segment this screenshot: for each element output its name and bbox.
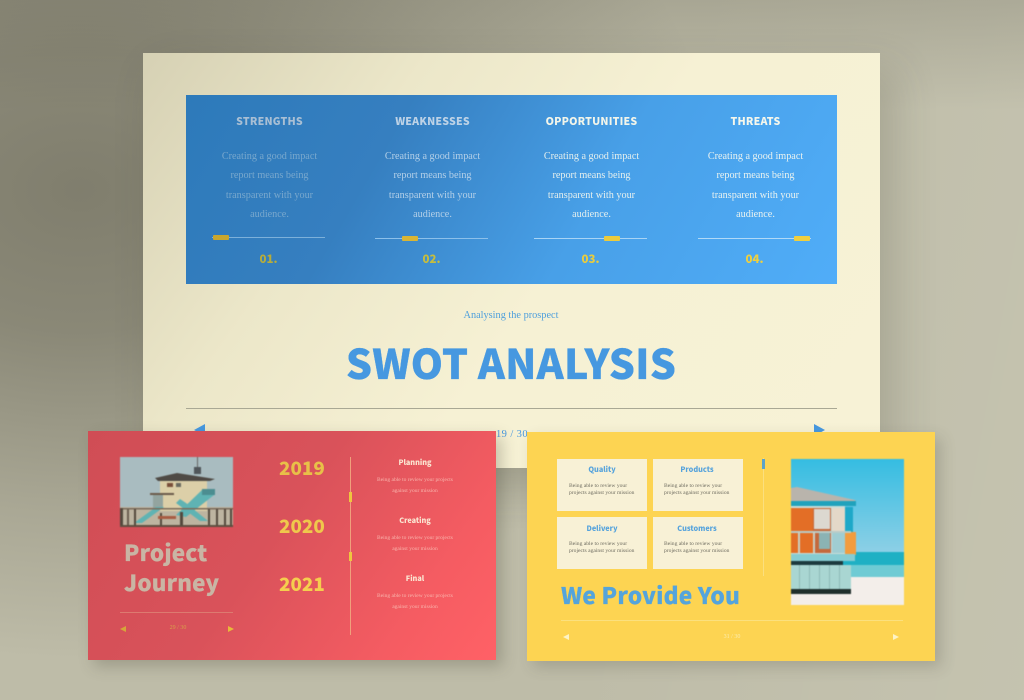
text: delivery body: projects against your mission — [569, 548, 634, 554]
text: quality body — [569, 482, 634, 496]
text: threats body: report means being — [716, 170, 795, 181]
text: products body: Being able to review your — [664, 482, 722, 488]
text: final body: against your mission — [392, 604, 438, 610]
text: creating body: Being able to review your projects — [377, 535, 453, 541]
text: customers body — [664, 540, 730, 554]
timeline — [349, 457, 352, 635]
number: 04: 04. — [745, 251, 764, 267]
heading: final: Final — [406, 574, 424, 584]
card: delivery — [557, 517, 647, 569]
divider line — [120, 612, 233, 613]
divider line — [561, 620, 903, 621]
year: 2019: 2019 — [279, 454, 325, 481]
number: 01: 01. — [259, 251, 278, 267]
panel: We Provide You slide — [527, 432, 935, 661]
text: weaknesses body: Creating a good impact — [385, 150, 480, 162]
card: quality — [557, 459, 647, 511]
title: Project Journey — [124, 536, 219, 598]
text: strengths body: report means being — [230, 170, 309, 181]
card: customers — [653, 517, 743, 569]
text: threats body — [708, 150, 804, 220]
text: weaknesses body: audience. — [413, 209, 452, 220]
text: opportunities body: report means being — [552, 170, 631, 181]
page number: 31 / 30: 31 / 30 — [724, 634, 740, 640]
text: quality body: projects against your mission — [569, 490, 634, 496]
text: quality body: Being able to review your — [569, 482, 627, 488]
text: weaknesses body: report means being — [393, 170, 472, 181]
text: threats body: Creating a good impact — [708, 150, 803, 162]
title: Project Journey: Project — [124, 536, 207, 568]
text: weaknesses body — [385, 150, 480, 220]
text: opportunities body: transparent with your — [548, 190, 635, 200]
arrow: previous — [194, 424, 205, 436]
text: creating body — [377, 535, 453, 552]
year: 2021: 2021 — [279, 570, 325, 597]
text: strengths body: transparent with your — [226, 190, 313, 200]
heading: planning: Planning — [398, 458, 432, 468]
heading: delivery: Delivery — [587, 524, 617, 534]
text: planning body: Being able to review your projects — [377, 477, 453, 483]
text: products body: projects against your mission — [664, 490, 729, 496]
text: delivery body — [569, 540, 634, 554]
text: opportunities body: Creating a good impact — [544, 150, 639, 162]
progress slider: 3 — [534, 236, 647, 241]
panel: SWOT blue band — [186, 95, 837, 284]
text: threats body: audience. — [736, 209, 775, 220]
arrow: next — [228, 626, 234, 632]
text: strengths body — [222, 150, 318, 220]
photo: lifeguard tower — [119, 456, 234, 528]
arrow: next — [814, 424, 825, 436]
title: Project Journey: Journey — [124, 566, 219, 598]
arrow: previous — [120, 626, 126, 632]
heading: quality: Quality — [588, 465, 616, 475]
text: opportunities body: audience. — [572, 209, 611, 220]
number: 02: 02. — [422, 251, 441, 267]
photo: beach hut — [790, 458, 905, 606]
title: SWOT Analysis: SWOT ANALYSIS — [346, 331, 676, 391]
text: delivery body: Being able to review your — [569, 540, 627, 546]
milestone: planning — [377, 458, 453, 494]
title: We Provide You: We Provide You — [561, 578, 740, 611]
heading: customers: Customers — [677, 524, 717, 534]
heading: weaknesses: WEAKNESSES — [395, 114, 470, 129]
text: customers body: projects against your mission — [664, 548, 729, 554]
text: final body — [377, 593, 453, 610]
vertical slider — [762, 458, 765, 576]
column: weaknesses — [375, 114, 488, 267]
column: opportunities — [534, 114, 647, 267]
panel: Project Journey slide — [88, 431, 496, 660]
divider line — [186, 408, 837, 409]
column: strengths — [212, 114, 325, 267]
text: planning body — [377, 477, 453, 494]
column: threats — [698, 114, 811, 267]
heading: creating: Creating — [399, 516, 431, 526]
progress slider: 4 — [698, 236, 811, 241]
page number: 19 / 30: 19 / 30 — [496, 429, 528, 440]
heading: products: Products — [680, 465, 714, 475]
milestone: final — [377, 574, 453, 610]
arrow: next — [893, 634, 899, 640]
year: 2020: 2020 — [279, 512, 325, 539]
text: creating body: against your mission — [392, 546, 438, 552]
text: opportunities body — [544, 150, 640, 220]
text: final body: Being able to review your projects — [377, 593, 453, 599]
card: products — [653, 459, 743, 511]
panel: SWOT slide — [143, 53, 880, 468]
heading: opportunities: OPPORTUNITIES — [546, 114, 637, 129]
text: strengths body: audience. — [250, 209, 289, 220]
arrow: previous — [563, 634, 569, 640]
subtitle: analysing the prospect: Analysing the prospect — [464, 310, 558, 321]
milestone: creating — [377, 516, 453, 552]
page number: 29 / 30: 29 / 30 — [170, 625, 186, 631]
heading: threats: THREATS — [731, 114, 780, 129]
text: customers body: Being able to review your — [664, 540, 722, 546]
number: 03: 03. — [581, 251, 600, 267]
text: products body — [664, 482, 730, 496]
progress slider: 1 — [212, 235, 325, 240]
text: strengths body: Creating a good impact — [222, 150, 317, 162]
heading: strengths: STRENGTHS — [236, 114, 303, 129]
text: threats body: transparent with your — [712, 190, 799, 200]
progress slider: 2 — [375, 236, 488, 241]
text: planning body: against your mission — [392, 488, 438, 494]
text: weaknesses body: transparent with your — [389, 190, 476, 200]
